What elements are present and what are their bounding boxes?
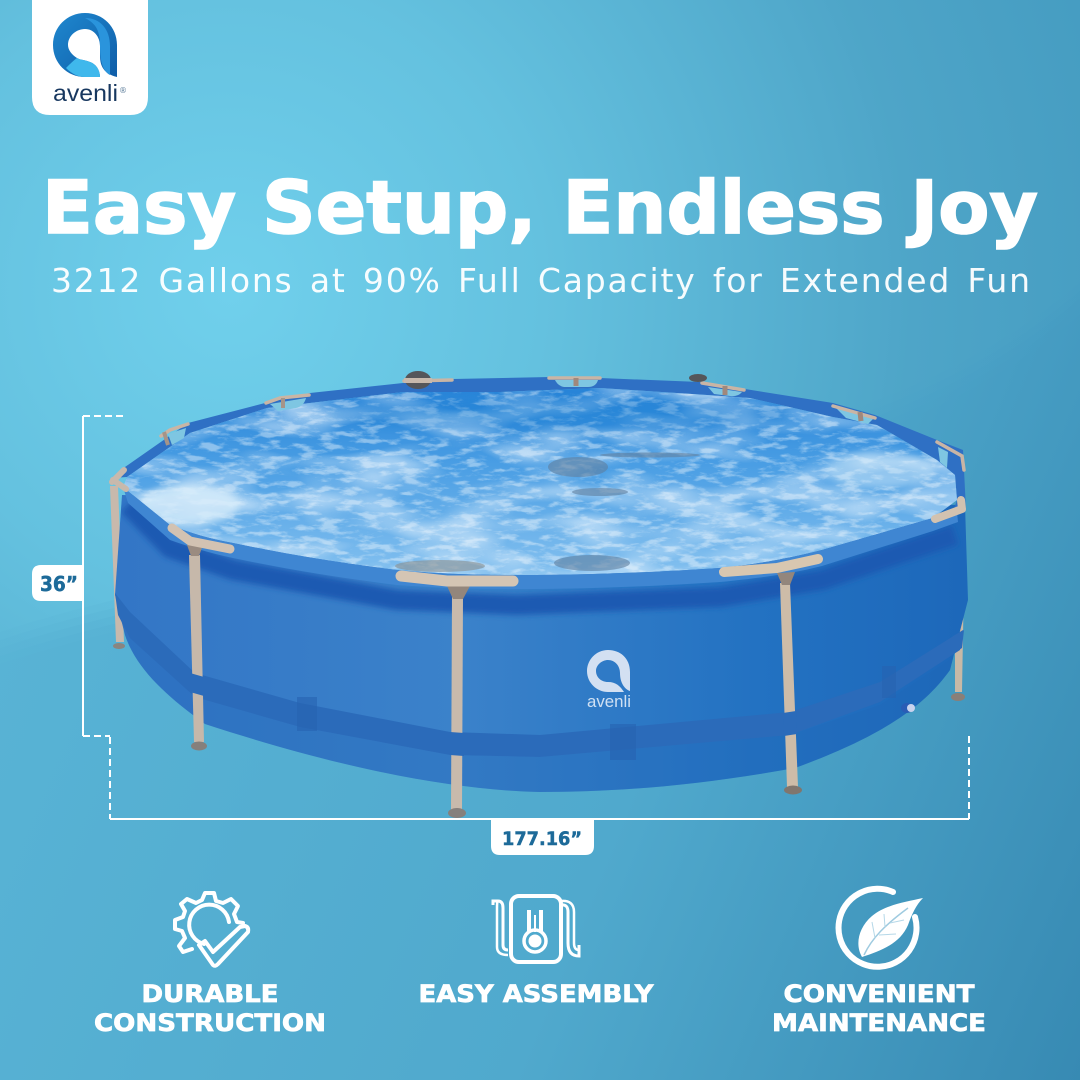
logo wordmark: avenli [53, 80, 118, 106]
title: Easy Setup, Endless Joy [42, 166, 1038, 251]
post front left small rim [112, 470, 126, 489]
water [120, 380, 970, 580]
window cutouts [168, 380, 948, 468]
icon: gear with check [175, 893, 248, 966]
pool logo [587, 650, 631, 711]
height label: 36” [40, 572, 78, 596]
height dimension line [83, 416, 125, 736]
icon: thermometer panel [493, 896, 579, 962]
front post 2 [172, 528, 230, 750]
width label: 177.16” [502, 828, 582, 850]
frame connectors back [161, 378, 964, 470]
height label [32, 565, 82, 601]
front post 4 [724, 559, 818, 794]
back post right [951, 520, 965, 701]
registered mark: ® [119, 86, 127, 95]
pool illustration [110, 371, 970, 818]
feature: durable construction [94, 893, 326, 1037]
rim front [123, 487, 958, 589]
feature: easy assembly [418, 896, 654, 1008]
width dimension line [110, 736, 969, 819]
subtitle: 3212 Gallons at 90% Full Capacity for Extended Fun [51, 261, 1030, 300]
label: convenient maintenance: CONVENIENT [784, 980, 975, 1008]
support belt [115, 593, 963, 757]
drain valve [901, 703, 915, 713]
shadow patches [395, 452, 700, 572]
back post left [110, 486, 125, 649]
feature: convenient maintenance: MAINTENANCE [772, 1009, 986, 1037]
front post 3 [401, 576, 513, 818]
label: easy assembly: EASY ASSEMBLY [418, 980, 654, 1008]
belt overlap on posts [190, 630, 964, 756]
feature: convenient maintenance [772, 889, 986, 1037]
logo badge [32, 0, 148, 115]
wall lower shading [115, 505, 965, 800]
belt straps [297, 666, 896, 760]
pool logo: avenli [587, 692, 631, 711]
back connector stems and skimmer [164, 371, 861, 445]
icon: avenli logo mark [53, 13, 117, 77]
rim back [112, 377, 966, 515]
width label [491, 820, 594, 855]
icon: leaf in ring [839, 889, 923, 967]
pool wall [115, 495, 968, 792]
feature: durable construction: CONSTRUCTION [94, 1009, 326, 1037]
label: durable construction: DURABLE [142, 980, 278, 1008]
front connector right [935, 500, 962, 519]
